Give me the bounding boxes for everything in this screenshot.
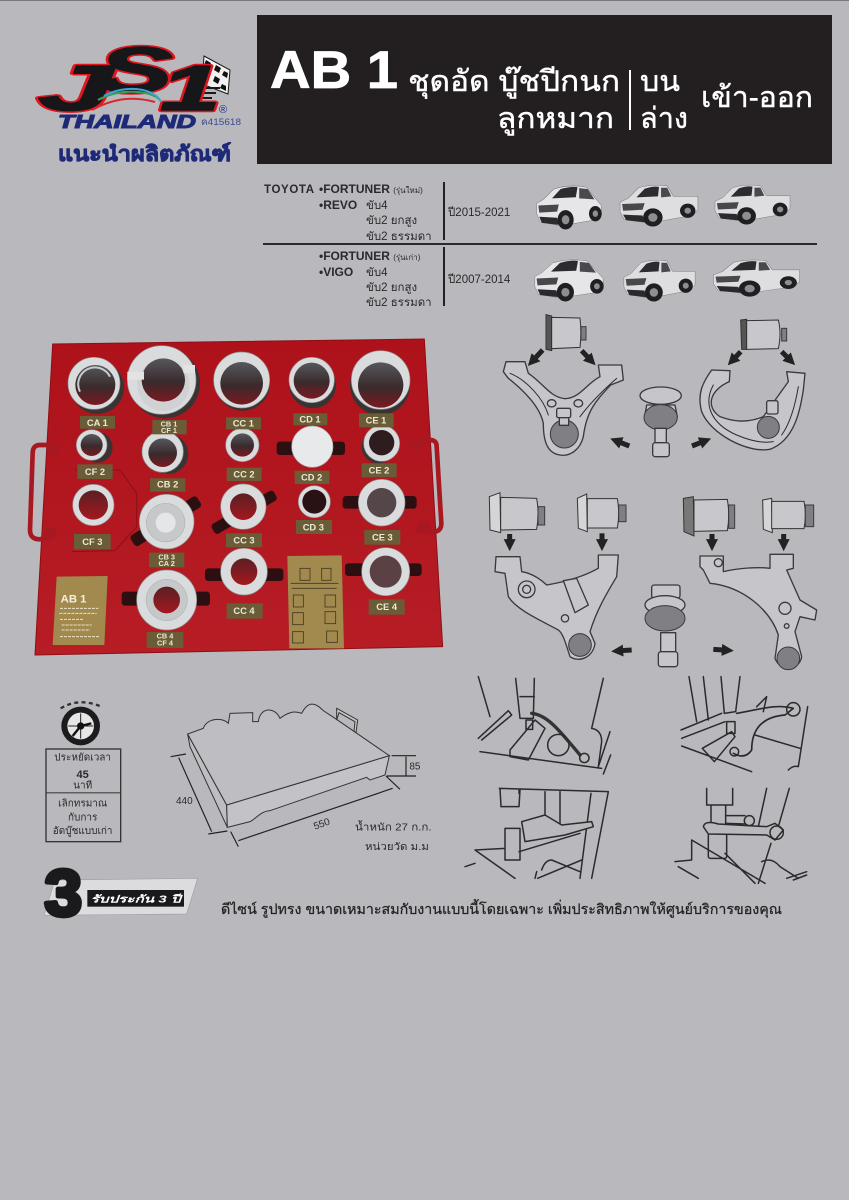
ring CF2 <box>76 430 113 463</box>
row 2015-2021 text: •FORTUNER (รุ่นใหม่) <box>319 182 423 196</box>
ring CD3 <box>298 486 330 518</box>
slots <box>122 442 422 606</box>
ring CC3 <box>221 484 266 529</box>
time saving text box: เลิกทรมาณ <box>58 799 107 810</box>
logo emblem JS1: J <box>38 53 116 124</box>
car swoosh <box>92 89 161 110</box>
warranty badge: 3 <box>45 857 82 930</box>
label plates: CD 2 <box>301 473 322 483</box>
logo emblem JS1: J <box>38 53 116 124</box>
nameplate AB 1: AB 1 <box>61 594 86 606</box>
instruction plate <box>287 555 344 648</box>
weight and unit note <box>355 820 432 853</box>
row 2007-2014 text: ขับ2 ธรรมดา <box>366 297 432 309</box>
car: Fortuner new <box>537 186 602 229</box>
ring CC1 <box>214 352 270 411</box>
product title: ชุดอัด บู๊ชปีกนก <box>408 66 620 99</box>
car: Fortuner old <box>535 260 604 302</box>
logo emblem JS1: 1 <box>160 52 221 124</box>
product title <box>408 66 813 136</box>
box dimension drawing <box>171 704 432 853</box>
vehicle compatibility table <box>263 182 817 309</box>
subtitle: แนะนำผลิตภัณฑ์ <box>58 142 231 166</box>
dimension labels: 550 <box>312 816 332 833</box>
ring CB1 <box>127 346 200 418</box>
label plates: CA 1 <box>87 418 108 428</box>
nameplate AB 1 <box>53 576 108 645</box>
press step 2 <box>681 677 808 772</box>
product title: เข้า-ออก <box>701 82 813 114</box>
label plates: CE 3 <box>372 533 393 543</box>
label plates: CE 1 <box>366 415 386 425</box>
product title: ลูกหมาก <box>497 103 614 136</box>
label plates: CE 2 <box>369 465 389 475</box>
label plates: CF 2 <box>85 467 105 477</box>
label plates: CF 1 <box>161 426 177 435</box>
time saving text box: 45 <box>77 769 89 781</box>
registration number: ค415618 <box>201 117 241 128</box>
row 2015-2021 text: •REVO <box>319 198 357 212</box>
product code: AB 1 <box>270 41 398 100</box>
label plates: CE 4 <box>376 602 398 612</box>
label plates: CB 4 <box>157 632 174 641</box>
time saving text box <box>46 749 121 842</box>
control arm diagrams <box>489 315 817 670</box>
ring CD1 <box>289 357 336 408</box>
car: Vigo 4WD <box>624 260 695 302</box>
lower right arm with bushings <box>683 497 817 670</box>
time saving text box: อัดบู๊ชแบบเก่า <box>53 825 113 837</box>
press step 3 <box>465 788 608 878</box>
label plates <box>74 413 405 648</box>
dimension lines <box>171 754 416 847</box>
label plates: CB 2 <box>157 480 178 490</box>
ring CB4 <box>137 570 197 630</box>
time saving text box: นาที <box>73 780 92 792</box>
icon: stopwatch <box>61 702 103 745</box>
weight and unit note: หน่วยวัด ม.ม <box>365 842 429 853</box>
product title: บน <box>640 66 680 98</box>
ring CF3 <box>73 484 114 526</box>
press step 4 <box>675 788 807 883</box>
logo emblem JS1 <box>38 34 221 124</box>
label plates: CD 1 <box>299 415 321 425</box>
label plates: CD 3 <box>303 523 324 533</box>
product title: ล่าง <box>640 103 688 135</box>
ring CD2 <box>292 426 333 467</box>
board <box>35 339 443 655</box>
ring CA1 <box>68 357 124 414</box>
weight and unit note: น้ำหนัก 27 ก.ก. <box>355 820 432 834</box>
ring CC4 <box>221 548 267 595</box>
dimension labels <box>176 761 421 833</box>
row 2015-2021 text: ขับ4 <box>366 200 388 212</box>
handle left <box>30 445 60 539</box>
ring CE3 <box>358 479 405 526</box>
label plates: CC 2 <box>233 470 255 480</box>
row 2007-2014 text: ขับ2 ยกสูง <box>366 282 417 294</box>
label plates: CB 1 <box>161 420 177 429</box>
press usage diagrams <box>465 677 808 883</box>
warranty badge: รับประกัน 3 ปี <box>91 893 184 905</box>
lower left arm with bushings <box>489 493 626 659</box>
label plates: CA 2 <box>158 559 175 568</box>
row 2015-2021 text: ปี2015-2021 <box>447 206 510 219</box>
logo emblem JS1: S <box>98 34 173 106</box>
label plates: CB 3 <box>158 552 175 561</box>
row 2007-2014 text: •FORTUNER (รุ่นเก่า) <box>319 249 421 263</box>
lower ball joint and arrows <box>622 585 723 667</box>
car: Revo 2WD <box>715 185 790 225</box>
label plates: CC 4 <box>233 606 255 616</box>
header panel <box>257 15 832 164</box>
logo: JS1 Thailand <box>38 34 241 166</box>
time saving text box: ประหยัดเวลา <box>54 753 111 764</box>
upper right arm with bushing <box>700 319 805 450</box>
time saving block <box>46 702 121 842</box>
logo emblem JS1: 1 <box>160 52 221 124</box>
product photo: red tool board <box>30 339 443 655</box>
row 2007-2014 text <box>319 249 511 309</box>
ring CE4 <box>362 548 410 596</box>
ring CE1 <box>350 351 410 415</box>
row 2015-2021 text: ขับ2 ยกสูง <box>366 215 417 227</box>
ring CB2 <box>142 431 188 474</box>
dimension labels: 440 <box>176 796 193 807</box>
brand name THAILAND: THAILAND <box>58 112 196 132</box>
car: Vigo 2WD <box>713 260 800 297</box>
logo emblem JS1: S <box>98 34 173 106</box>
handle right <box>412 440 441 532</box>
ring CC2 <box>226 428 259 462</box>
row 2015-2021 text: TOYOTA <box>264 184 314 196</box>
warranty badge <box>44 857 198 930</box>
board outline <box>188 704 389 827</box>
row 2007-2014 text: •VIGO <box>319 265 353 279</box>
press step 1 <box>478 677 611 774</box>
registered mark: ® <box>219 104 227 116</box>
time saving text box: กับการ <box>68 813 98 824</box>
dimension labels: 85 <box>409 761 421 772</box>
ring CE2 <box>362 425 400 463</box>
row 2015-2021 text: ขับ2 ธรรมดา <box>366 231 432 243</box>
upper ball joint and arrows <box>620 387 701 457</box>
upper left arm with bushing <box>503 315 623 455</box>
design description: ดีไซน์ รูปทรง ขนาดเหมาะสมกับงานแบบนี้โดยเฉพาะ เพิ่มประสิทธิภาพให้ศูนย์บริการของคุณ <box>221 899 782 918</box>
checkered flag <box>194 56 230 108</box>
ring CB3 <box>139 494 194 549</box>
label plates: CF 3 <box>82 537 102 547</box>
row 2007-2014 text: ปี2007-2014 <box>447 273 511 286</box>
car: Revo 4WD <box>620 185 698 227</box>
label plates: CC 1 <box>233 419 254 429</box>
label plates: CC 3 <box>233 535 255 545</box>
label plates: CF 4 <box>157 638 174 647</box>
row 2015-2021 text <box>264 182 510 243</box>
row 2007-2014 text: ขับ4 <box>366 267 388 279</box>
